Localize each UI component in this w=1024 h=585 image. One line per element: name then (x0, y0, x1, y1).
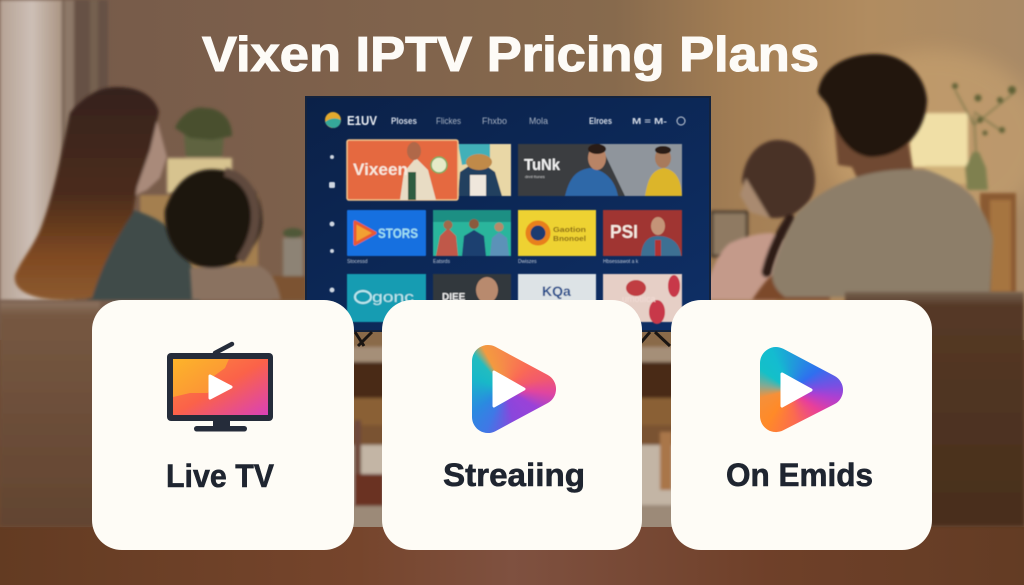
panel: On Emids (671, 300, 932, 550)
television (305, 96, 711, 346)
floor (0, 527, 1024, 585)
label: On Emids: On Emids (726, 457, 873, 493)
person: girl with ponytail (703, 140, 815, 300)
tile: yellow: Gaotion (553, 227, 586, 234)
tile: PSI: PSI (610, 222, 638, 242)
row 3 tiles (347, 274, 682, 324)
left background furniture: plant, lamp shade, cabinet (140, 107, 306, 300)
screen frame (305, 96, 711, 332)
screen nav bar: Ploses (391, 116, 417, 126)
tile: pink pattern (603, 274, 682, 324)
row 2 captions: Hbsessawot a k (603, 259, 639, 265)
screen nav bar (325, 112, 685, 128)
row 2 captions (347, 259, 639, 265)
right sofa (845, 292, 1024, 526)
curtains (0, 0, 108, 300)
screen nav bar: E1UV (347, 113, 377, 128)
row 2 tiles (347, 210, 682, 265)
tile: highlighted Vixen (347, 140, 458, 200)
person: woman with long hair (15, 87, 200, 300)
title: Vixen IPTV Pricing Plans (202, 28, 819, 82)
left sofa (0, 302, 100, 526)
wall (0, 0, 1024, 340)
tile: people on teal (433, 210, 511, 256)
person: man in t-shirt (752, 54, 993, 300)
tile: STORS (347, 210, 426, 256)
lamp glow (825, 50, 1024, 230)
screen nav bar: Elroes (589, 116, 612, 126)
screen nav bar: Mola (529, 116, 548, 126)
tile: PSI (603, 210, 682, 256)
tile: teal: gonc (372, 289, 415, 306)
tile: dark portrait: DIEE (442, 292, 466, 303)
icon: gradient play button (472, 345, 556, 433)
tile: yellow: Bnonoel (553, 236, 586, 243)
row 1 tiles (347, 140, 682, 200)
tile: cartoon panel (455, 144, 511, 196)
row 2 captions: Eatsrds (433, 259, 450, 265)
label: Live TV: Live TV (166, 458, 275, 494)
tile: STORS: STORS (378, 225, 418, 241)
right background furniture: lamp, vase, cabinet, frame (712, 83, 1016, 293)
label: Streaiing: Streaiing (443, 457, 585, 493)
panel: Streaming (382, 300, 642, 550)
panel: Live TV (92, 300, 354, 550)
tile: pink pattern: umotiica (622, 294, 656, 304)
TV console and rug below the television (340, 330, 680, 531)
tile: wide banner (518, 144, 682, 196)
tile: highlighted Vixen: Vixeen (353, 160, 408, 179)
icon: television with play button (167, 344, 273, 432)
tile: yellow (518, 210, 596, 256)
tile: KOA (518, 274, 596, 322)
row 2 captions: Dwiszes (518, 259, 537, 265)
screen sidebar icons (329, 155, 335, 292)
row 2 captions: Stocessd (347, 259, 368, 265)
tile: teal (347, 274, 426, 322)
TV stand legs (355, 332, 670, 346)
tile: dark portrait (433, 274, 511, 322)
screen nav bar: Flickes (436, 116, 461, 126)
icon: gradient play button (760, 347, 843, 432)
tile: KOA: KQa (542, 283, 571, 299)
person: child with curly hair (165, 169, 281, 300)
screen nav bar: Fhxbo (482, 116, 507, 126)
screen nav bar: M = M- (632, 117, 667, 126)
tile: wide banner: dnnt ttunes (525, 174, 545, 179)
tile: wide banner: TuNk (524, 157, 560, 174)
